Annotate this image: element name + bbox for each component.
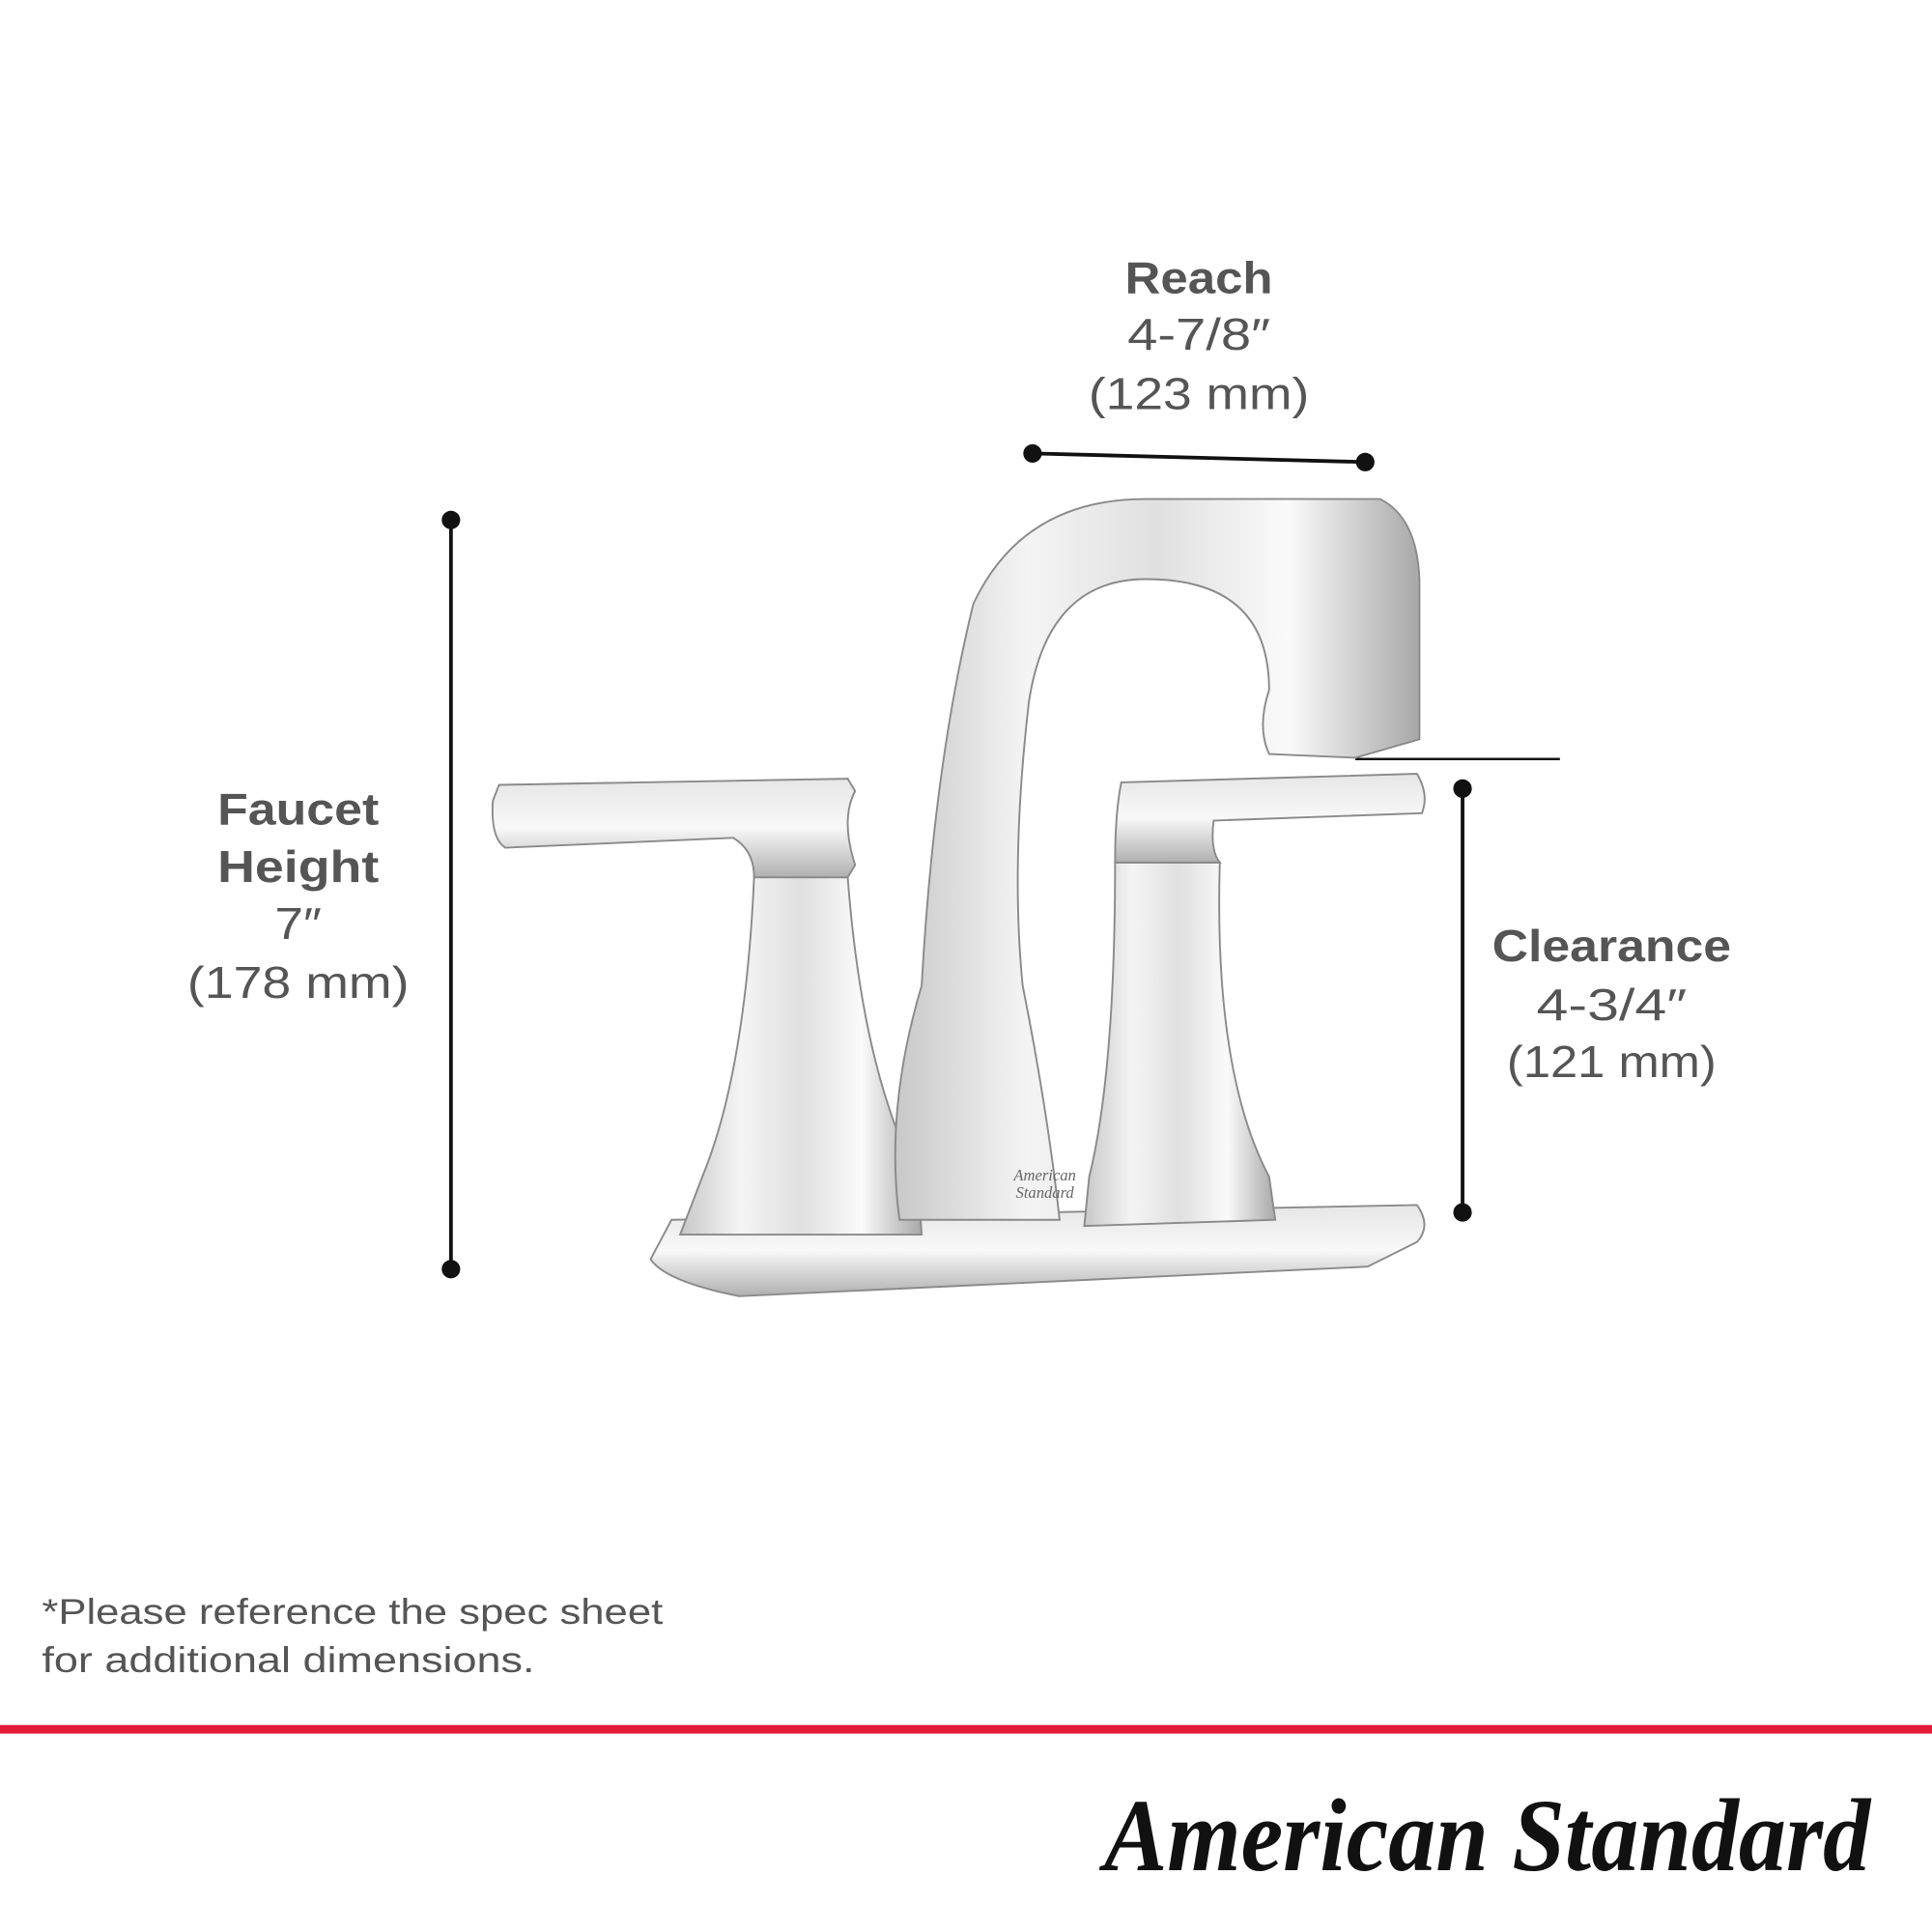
- faucet height label: (178 mm): [187, 957, 409, 1008]
- reach label: 4-7/8″: [1127, 309, 1270, 359]
- reach dimension line: [1024, 444, 1374, 470]
- faucet illustration: [493, 499, 1425, 1296]
- footnote: for additional dimensions.: [42, 1640, 535, 1680]
- clearance label: 4-3/4″: [1537, 980, 1687, 1030]
- clearance label: (121 mm): [1507, 1037, 1717, 1087]
- left handle body: [680, 877, 922, 1235]
- brand logo: American Standard: [1098, 1779, 1872, 1893]
- faucet height label: [187, 783, 409, 1008]
- reach label: (123 mm): [1089, 368, 1309, 418]
- faucet height label: 7″: [274, 898, 322, 949]
- reach label: [1089, 253, 1309, 418]
- red divider: [0, 1725, 1932, 1734]
- right lever: [1115, 774, 1425, 863]
- faucet height label: Faucet: [217, 783, 379, 834]
- footnote: [42, 1592, 663, 1680]
- clearance label: Clearance: [1492, 921, 1731, 971]
- left lever: [493, 779, 855, 877]
- clearance dimension line: [1355, 759, 1560, 1221]
- base plate: [650, 1205, 1424, 1296]
- faucet height label: Height: [217, 841, 379, 892]
- faucet logo mark: [1012, 1166, 1076, 1202]
- spout: [895, 499, 1419, 1220]
- right handle body: [1084, 863, 1275, 1226]
- faucet logo mark: American: [1012, 1166, 1076, 1184]
- faucet height dimension line: [442, 511, 460, 1278]
- faucet logo mark: Standard: [1016, 1183, 1074, 1202]
- clearance label: [1492, 921, 1731, 1087]
- reach label: Reach: [1125, 253, 1273, 303]
- footnote: *Please reference the spec sheet: [42, 1592, 663, 1632]
